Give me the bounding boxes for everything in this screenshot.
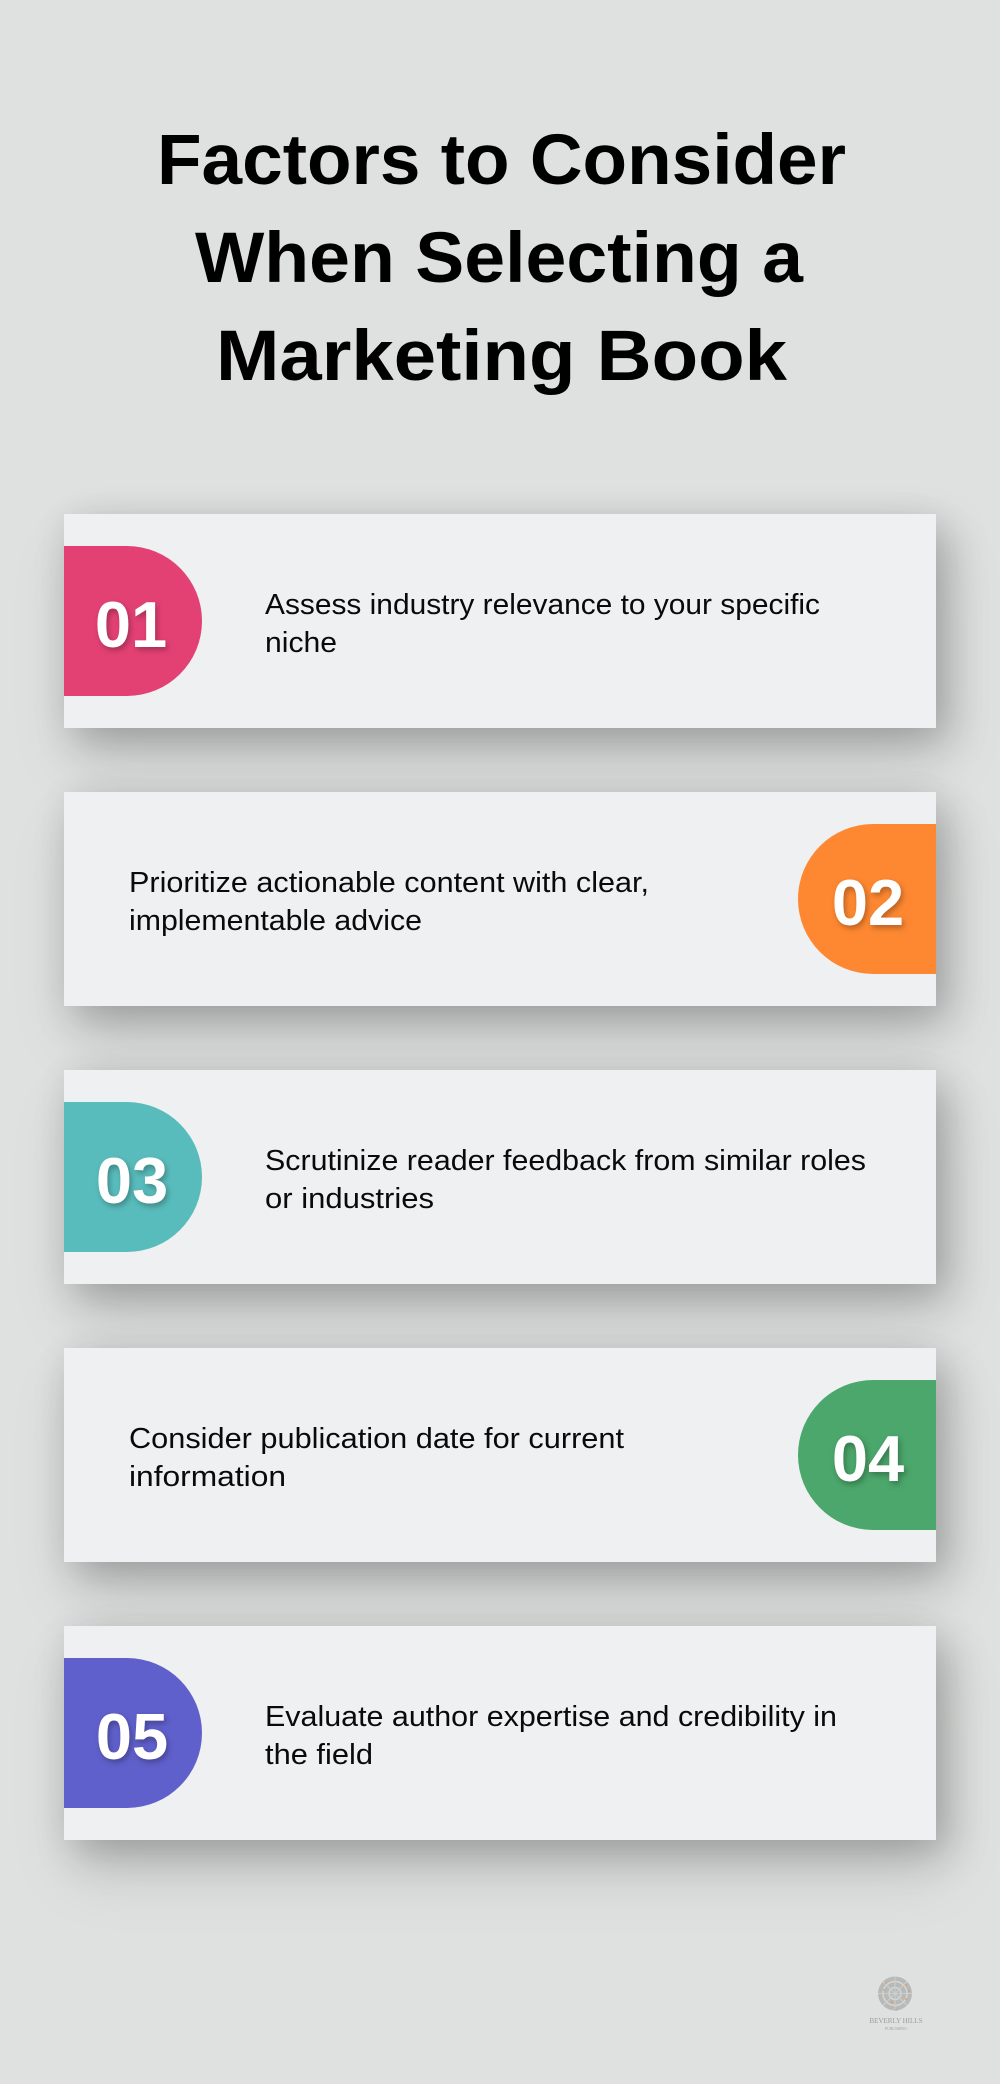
panel: factor 02 bbox=[64, 792, 936, 1006]
badge: 05 bbox=[64, 1658, 202, 1808]
text: factor 02: implementable advice bbox=[129, 905, 422, 937]
text: factor 03 bbox=[96, 1144, 866, 1217]
text: factor 03: Scrutinize reader feedback from similar roles bbox=[265, 1145, 866, 1177]
panel: factor 01 bbox=[64, 514, 936, 728]
title: When Selecting a bbox=[195, 219, 804, 298]
text: factor 03: or industries bbox=[265, 1183, 434, 1215]
text: factor 01: niche bbox=[265, 627, 337, 659]
text: factor 02: 02 bbox=[832, 866, 904, 939]
logo: Beverly Hills Publishing: PUBLISHING bbox=[885, 2026, 907, 2031]
badge: 03 bbox=[64, 1102, 202, 1252]
panel: factor 04 bbox=[64, 1348, 936, 1562]
badge: 02 bbox=[798, 824, 936, 974]
logo: Beverly Hills Publishing: BEVERLY HILLS bbox=[870, 2017, 923, 2025]
text: factor 03: 03 bbox=[96, 1144, 168, 1217]
logo: Beverly Hills Publishing bbox=[870, 1976, 923, 2031]
text: factor 04: information bbox=[129, 1461, 286, 1493]
panel: factor 03 bbox=[64, 1070, 936, 1284]
text: factor 01: 01 bbox=[95, 588, 167, 661]
text: factor 05 bbox=[96, 1700, 837, 1773]
text: factor 01 bbox=[95, 588, 820, 661]
text: factor 01: Assess industry relevance to your specific bbox=[265, 589, 820, 621]
text: factor 05: the field bbox=[265, 1739, 373, 1771]
title: Marketing Book bbox=[216, 317, 788, 396]
text: factor 04 bbox=[129, 1422, 908, 1495]
title bbox=[157, 121, 846, 396]
text: factor 05: Evaluate author expertise and credibility in bbox=[265, 1701, 837, 1733]
panel: factor 05 bbox=[64, 1626, 936, 1840]
text: factor 05: 05 bbox=[96, 1700, 168, 1773]
badge: 04 bbox=[798, 1380, 936, 1530]
text: factor 04: Consider publication date for current bbox=[129, 1423, 624, 1455]
title: Factors to Consider bbox=[157, 121, 846, 200]
text: factor 04: 04 bbox=[832, 1422, 904, 1495]
text: factor 02: Prioritize actionable content with clear, bbox=[129, 867, 649, 899]
text: factor 02 bbox=[129, 866, 906, 939]
badge: 01 bbox=[64, 546, 202, 696]
